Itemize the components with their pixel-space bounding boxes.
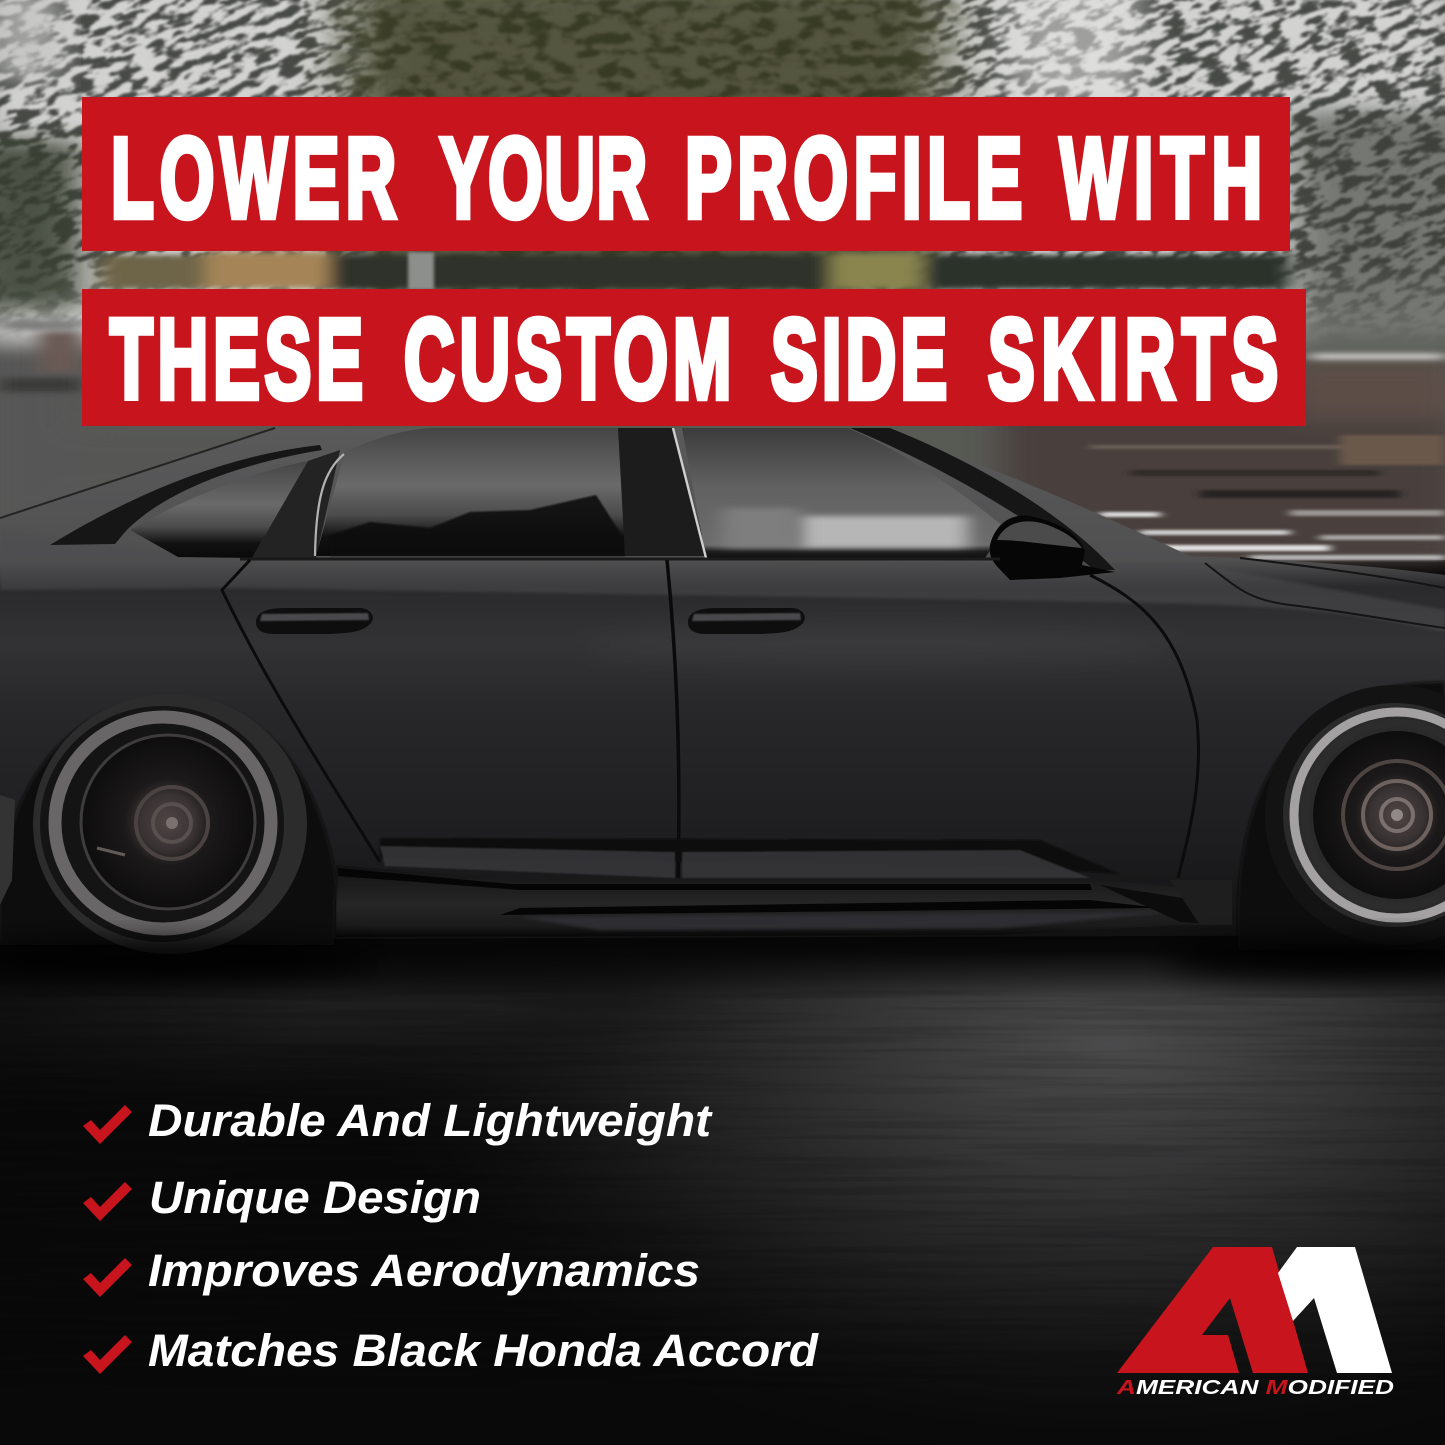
rear pillar trim [50, 445, 322, 545]
rear door window [316, 428, 625, 556]
feature: unique design: Unique Design [149, 1172, 481, 1223]
rocker panel [380, 846, 1090, 878]
left dark tree [0, 140, 80, 310]
upper body highlight [0, 530, 1445, 632]
title banner: line 1: WITH [1060, 115, 1262, 241]
door sheen [580, 623, 1180, 667]
front wheel arch [1238, 682, 1445, 950]
feature list [83, 1095, 820, 1376]
title banner: line 1: YOUR [440, 115, 647, 241]
title banner: line 2: THESE [110, 296, 363, 422]
title banner: line 2: SKIRTS [988, 296, 1278, 422]
car body [0, 428, 1445, 940]
logo mark red A [1117, 1247, 1308, 1373]
center door seam [667, 560, 679, 878]
pole [408, 252, 434, 290]
lower door crease [380, 838, 1120, 874]
front window [682, 428, 1005, 558]
reflection treeline [330, 495, 625, 556]
rear pillar [252, 450, 340, 558]
title banner: line 2: SIDE [771, 296, 947, 422]
roofline [0, 428, 275, 518]
title banner: line 2: CUSTOM [404, 296, 731, 422]
logo mark white 1 [1278, 1247, 1392, 1373]
rear wheel arch [0, 697, 336, 945]
rear quarter window [130, 461, 308, 558]
side mirror [990, 516, 1115, 580]
window reflection [798, 516, 968, 548]
B pillar [618, 428, 708, 556]
title banner: line 2 [82, 289, 1306, 426]
olive tree texture [300, 0, 990, 300]
foliage texture [0, 0, 1445, 337]
window reflection left [722, 508, 800, 548]
logo: American Modified [1116, 1247, 1394, 1399]
rear door seam [222, 560, 380, 862]
front door handle [688, 608, 805, 634]
title banner: line 1 [82, 97, 1290, 251]
rear bumper [0, 795, 15, 905]
chrome trim [315, 454, 344, 556]
feature: matches accord: Matches Black Honda Accord [148, 1325, 820, 1376]
front wheel [1265, 685, 1445, 945]
olive tree mass [350, 0, 940, 300]
rear door handle [256, 608, 373, 634]
rear wheel ground shadow [0, 942, 380, 978]
title banner: line 1: PROFILE [685, 115, 1022, 241]
road [0, 615, 1445, 1445]
front chrome trim [673, 428, 706, 558]
windshield pillar [850, 428, 1115, 570]
feature: aerodynamics: Improves Aerodynamics [148, 1245, 700, 1296]
rear wheel [33, 694, 307, 954]
car [0, 428, 1445, 978]
front wheel ground shadow [1165, 940, 1445, 976]
front door seam [1090, 575, 1199, 878]
white sky gap [1010, 0, 1140, 100]
logo wordmark: AMERICAN M ODIFIED [1116, 1377, 1394, 1399]
side skirt [336, 865, 1232, 937]
hood seam [1205, 558, 1445, 628]
right dark tree [1295, 110, 1445, 350]
title banner: line 1: LOWER [111, 115, 396, 241]
sky top left [0, 0, 60, 80]
background: blurred trees [0, 0, 1445, 574]
beltline [240, 558, 1000, 560]
feature: durable: Durable And Lightweight [148, 1095, 713, 1146]
